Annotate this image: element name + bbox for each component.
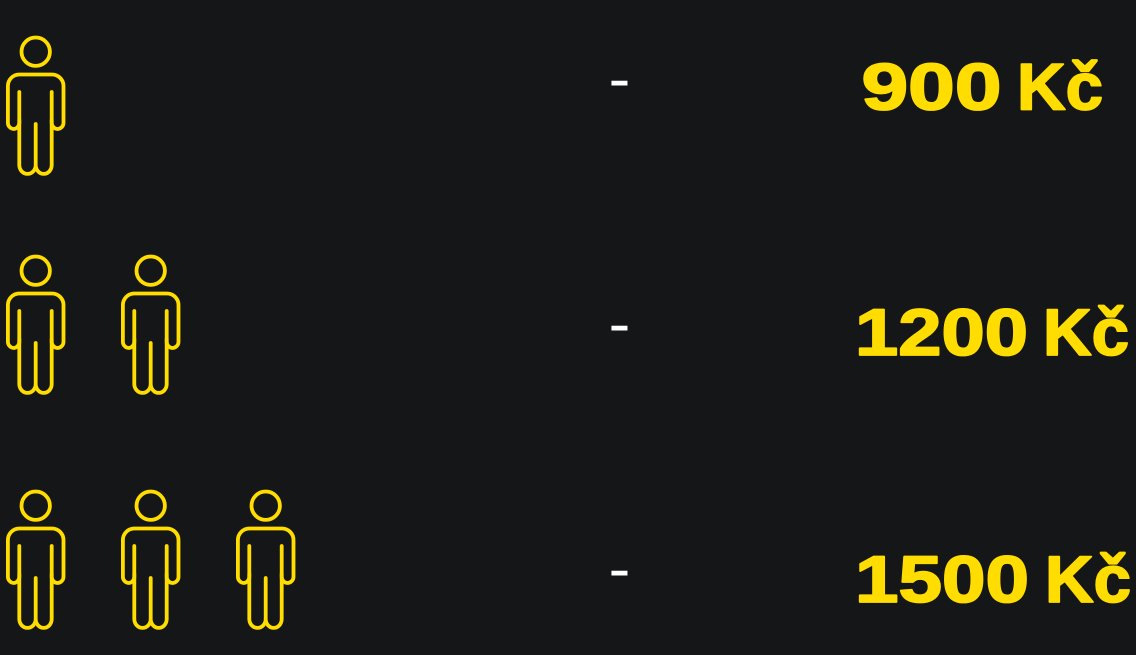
dash: -	[609, 58, 630, 102]
price: 1200 Kč: 1200	[855, 295, 1028, 369]
currency: Kč	[1045, 542, 1131, 616]
price: 1500 Kč: 1500	[855, 542, 1029, 616]
icon: person	[8, 38, 64, 174]
currency: Kč	[1017, 50, 1103, 124]
currency: Kč	[1043, 295, 1129, 369]
icon: person 1	[8, 256, 64, 393]
row 1: one person	[8, 38, 1103, 174]
icon: person 1	[8, 492, 64, 628]
dash: -	[609, 304, 630, 348]
icon: person 2	[123, 256, 179, 393]
dash: -	[609, 548, 630, 592]
icon: person 3	[238, 492, 294, 628]
price: 900 Kč: 900	[862, 50, 1002, 124]
icon: person 2	[123, 492, 179, 628]
row 2: two people	[8, 256, 1129, 393]
row 3: three people	[8, 492, 1131, 628]
